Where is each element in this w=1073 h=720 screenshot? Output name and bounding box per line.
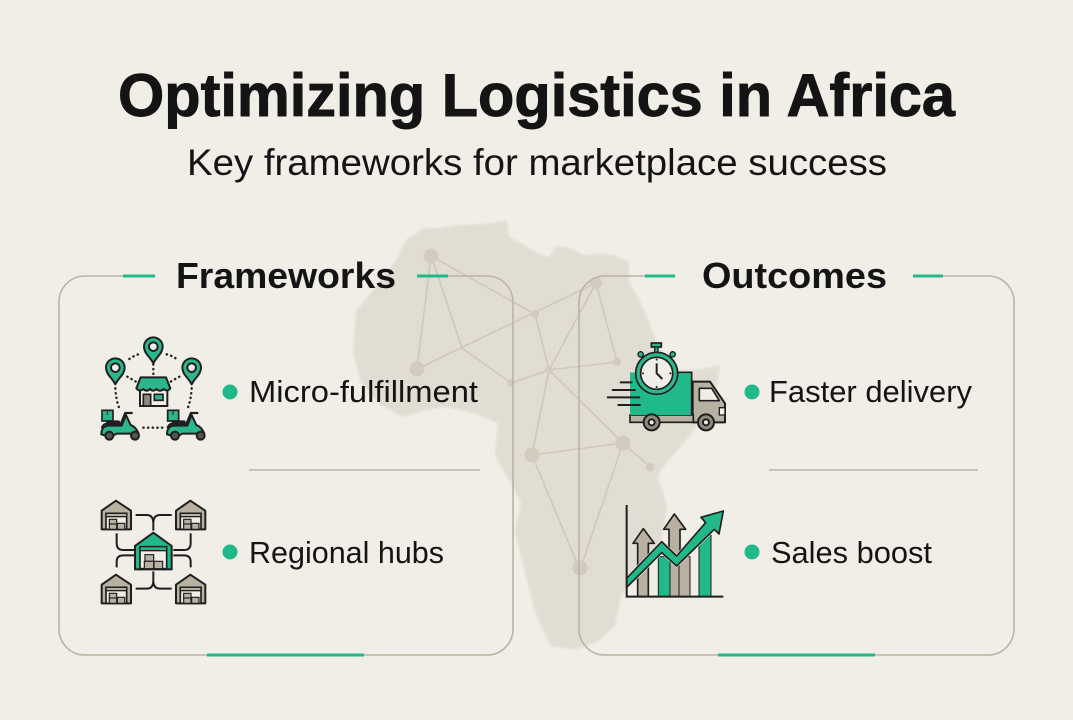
icon: micro-fulfillment	[101, 337, 205, 440]
divider	[769, 469, 978, 471]
panel: outcomes	[579, 255, 1014, 655]
title: Optimizing Logistics in Africa	[118, 62, 956, 129]
bullet	[744, 544, 760, 560]
divider	[249, 469, 480, 471]
bullet	[222, 384, 238, 400]
bullet	[744, 384, 760, 400]
icon: sales growth chart	[627, 505, 723, 597]
africa network map	[355, 223, 718, 647]
bullet	[222, 544, 238, 560]
panel border	[579, 276, 1014, 655]
panel: frameworks	[59, 255, 513, 655]
label: faster delivery: Faster delivery	[769, 374, 972, 409]
accent lines	[123, 276, 448, 655]
label: regional hubs: Regional hubs	[249, 535, 444, 570]
subtitle: Key frameworks for marketplace success	[187, 142, 887, 183]
label: sales boost: Sales boost	[771, 535, 932, 570]
panel border	[59, 276, 513, 655]
label: micro-fulfillment: Micro-fulfillment	[249, 374, 478, 409]
accent lines	[645, 276, 943, 655]
icon: regional hubs	[102, 501, 205, 603]
icon: delivery truck with stopwatch	[608, 343, 725, 430]
heading: Frameworks	[176, 255, 396, 296]
heading: Outcomes	[702, 255, 887, 296]
